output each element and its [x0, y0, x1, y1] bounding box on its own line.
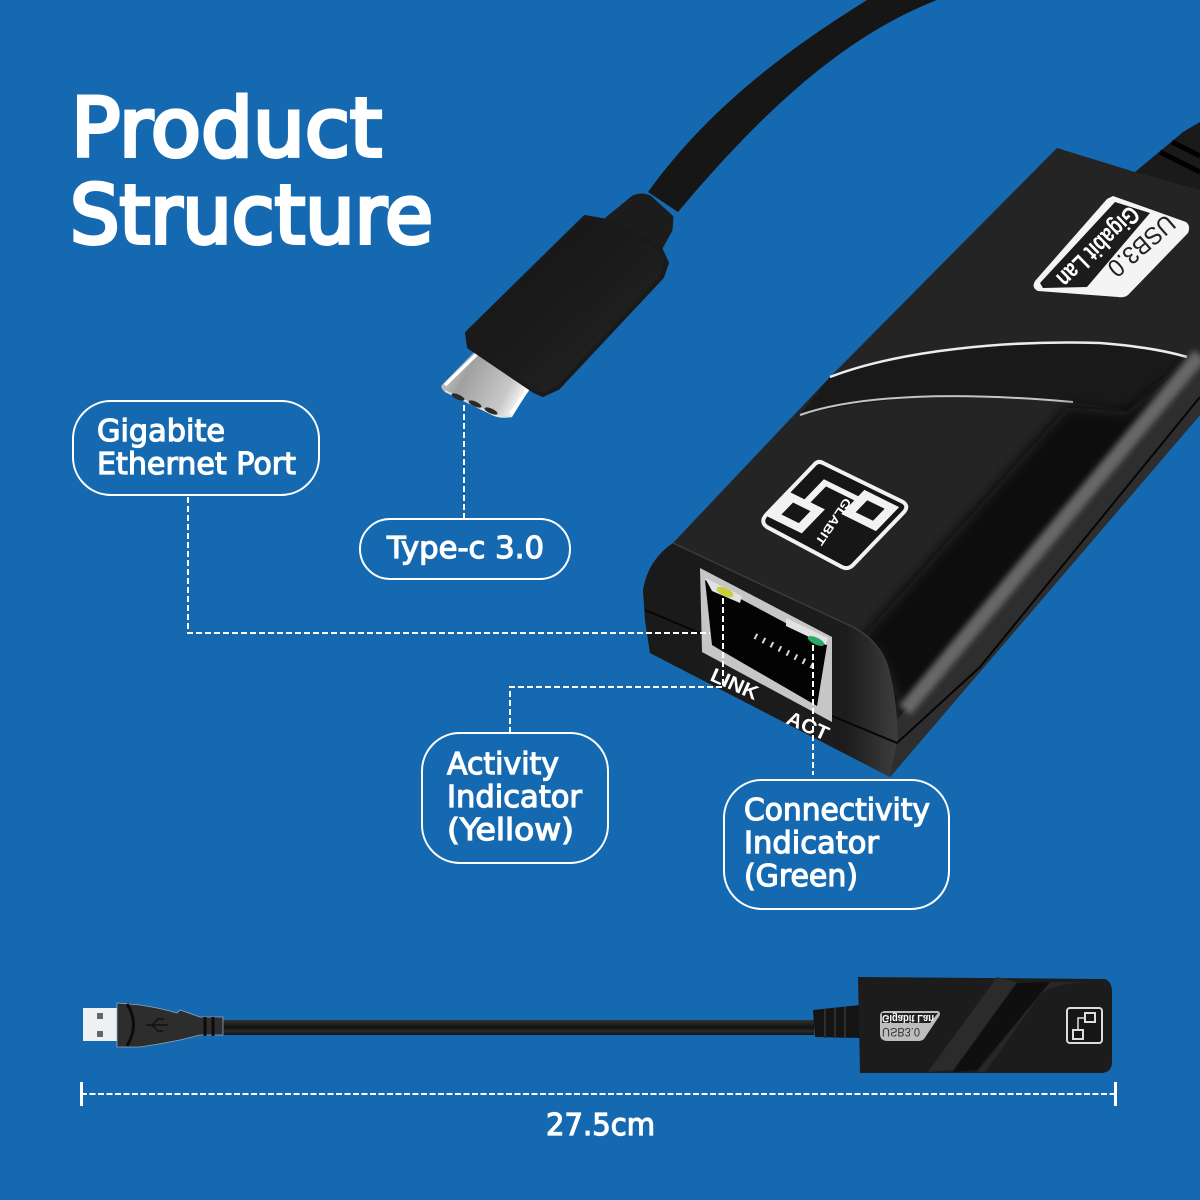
- usb3 label: [1034, 196, 1189, 297]
- swoosh bands: [928, 977, 1017, 1072]
- plug opening: [445, 391, 510, 417]
- callout: type-c: Type-c 3.0: [386, 531, 544, 566]
- boot details: [127, 1004, 213, 1046]
- dashed leader lines: [188, 405, 813, 775]
- callout: connectivity indicator: [724, 780, 949, 909]
- swoosh band: [800, 342, 1187, 415]
- full product view: [83, 977, 1112, 1073]
- callout: connectivity indicator: Indicator: [744, 826, 880, 861]
- ACT text: ACT: [783, 707, 832, 745]
- title: [70, 82, 433, 263]
- cable: [648, 0, 937, 212]
- yellow LED: [715, 585, 735, 599]
- cap top edge: [673, 543, 897, 742]
- icon: [1067, 1008, 1102, 1043]
- LINK text: LINK: [707, 664, 762, 705]
- usb3 label: USB3.0: [1102, 209, 1181, 282]
- front cap: [643, 543, 897, 777]
- callout: gigabit ethernet port: Gigabite: [97, 414, 225, 449]
- body lip: [890, 360, 1200, 777]
- plug rim highlights: [445, 351, 536, 414]
- adapter body: [643, 148, 1200, 777]
- usb-c cable and connector: [441, 0, 937, 418]
- side ridge highlight: [905, 355, 1200, 710]
- usb-a metal plug: [83, 1008, 117, 1041]
- callout: gigabit ethernet port: Ethernet Port: [97, 447, 296, 482]
- usb symbol: [146, 1019, 168, 1031]
- strain ribs: [1160, 142, 1200, 172]
- adapter body: [858, 977, 1112, 1073]
- length dimension: [80, 1082, 1117, 1143]
- label: Gigabit Lan: [882, 1012, 934, 1024]
- title: Product: [71, 82, 382, 176]
- title: Structure: [70, 169, 433, 263]
- callout: activity indicator: Activity: [447, 747, 559, 782]
- adapter strain relief: [813, 1005, 860, 1038]
- callout: activity indicator: [422, 733, 608, 863]
- dark shaded band: [860, 362, 1200, 720]
- metal plug: [441, 348, 538, 418]
- long cable: [222, 1020, 814, 1035]
- strain relief: [600, 195, 672, 250]
- adapter large view: [643, 122, 1200, 777]
- gigabit icon: [763, 462, 906, 568]
- usb3 label: Gigabit Lan: [1051, 200, 1145, 293]
- connector body: [467, 217, 667, 395]
- callout: activity indicator: Indicator: [447, 780, 583, 815]
- callout: gigabit ethernet port: [73, 401, 319, 495]
- adapter cable end: [1135, 122, 1200, 200]
- cap seam: [645, 397, 1200, 743]
- gigabit icon: GLABIT: [812, 495, 854, 549]
- label: [880, 1011, 940, 1041]
- callout: activity indicator: (Yellow): [447, 813, 574, 848]
- ethernet port: [700, 568, 832, 745]
- callout: connectivity indicator: (Green): [744, 859, 858, 894]
- callout: connectivity indicator: Connectivity: [744, 793, 930, 828]
- usb-a boot: [117, 1003, 223, 1047]
- plug slots: [451, 392, 498, 416]
- callout: type-c: [360, 519, 570, 579]
- green LED: [806, 634, 826, 648]
- length label: 27.5cm: [546, 1108, 655, 1143]
- label: USB3.0: [882, 1025, 920, 1039]
- swoosh highlights: [830, 342, 1187, 377]
